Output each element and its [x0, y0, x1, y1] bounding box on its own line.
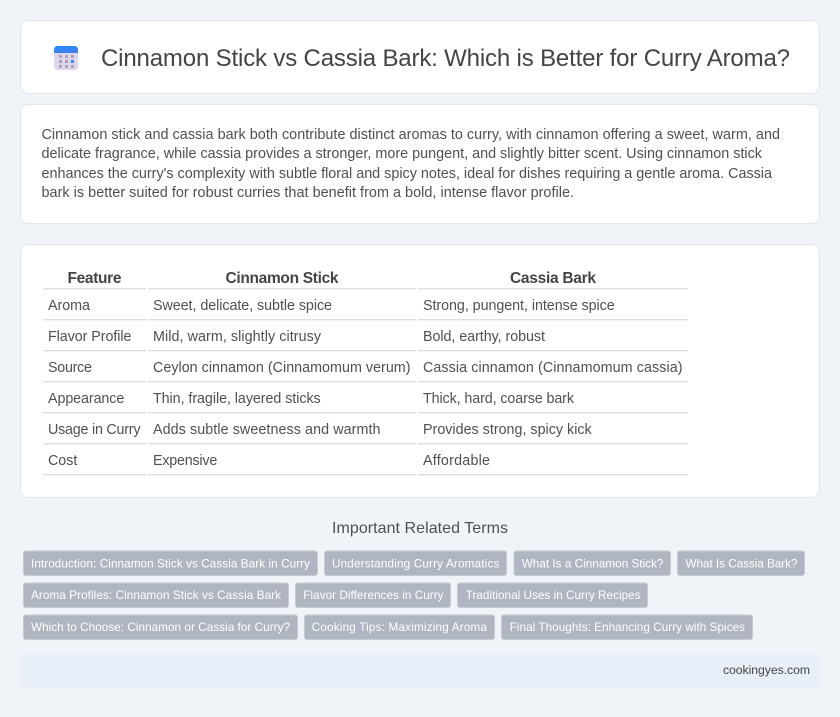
- footer: [20, 654, 820, 687]
- table row: source: Source: [48, 360, 92, 376]
- tag: [324, 551, 506, 576]
- table header row: Cinnamon Stick: [226, 270, 339, 287]
- table row: cost: Cost: [48, 453, 77, 469]
- table header row: Cassia Bark: [510, 270, 596, 287]
- tag: Flavor Differences in Curry: [303, 589, 444, 602]
- table row: flavor profile: Flavor Profile: [48, 329, 132, 345]
- table row: flavor profile: Mild, warm, slightly citrusy: [153, 329, 322, 345]
- table row: source: Cassia cinnamon (Cinnamomum cassia): [423, 360, 682, 376]
- table row: usage in curry: Provides strong, spicy kick: [423, 422, 593, 438]
- text block: introduction paragraph: [42, 127, 780, 201]
- table row: aroma: [48, 298, 615, 314]
- text block: introduction paragraph: Cinnamon stick and cassia bark both contribute distinct aromas to curry, with cinnamon offering a sweet, warm, and: [42, 127, 780, 143]
- footer source credit: cookingyes.com: [723, 663, 810, 677]
- tag list: related terms: [24, 551, 804, 640]
- tag: Final Thoughts: Enhancing Curry with Spices: [510, 621, 745, 634]
- tag: [458, 583, 648, 608]
- tag: [502, 615, 752, 640]
- table row: usage in curry: Adds subtle sweetness and warmth: [153, 422, 381, 438]
- heading: important related terms: Important Related Terms: [332, 520, 508, 537]
- text block: introduction paragraph: enhances the curry's complexity with subtle floral and spicy notes, ideal for dishes requiring a gentle aroma. Cassia: [42, 166, 772, 182]
- tag: [678, 551, 804, 576]
- table row: appearance: Thin, fragile, layered sticks: [153, 391, 321, 407]
- table row: source: Ceylon cinnamon (Cinnamomum verum): [153, 360, 410, 376]
- tag: [24, 551, 318, 576]
- table row: appearance: Appearance: [48, 391, 124, 407]
- tag: [304, 615, 494, 640]
- tag: [296, 583, 450, 608]
- table row: cost: Expensive: [153, 453, 217, 469]
- text block: introduction paragraph: bark is better suited for robust curries that benefit from a bold, intense flavor profile.: [42, 185, 574, 201]
- tag: What Is Cassia Bark?: [686, 557, 798, 570]
- table row: aroma: Strong, pungent, intense spice: [423, 298, 615, 314]
- table row: appearance: [48, 391, 575, 407]
- tag: Which to Choose: Cinnamon or Cassia for Curry?: [31, 621, 290, 634]
- panel: comparison table: [20, 244, 820, 498]
- table header row: Feature: [68, 270, 122, 287]
- tag: Cooking Tips: Maximizing Aroma: [312, 621, 487, 634]
- table row: appearance: Thick, hard, coarse bark: [423, 391, 575, 407]
- tag: [514, 551, 670, 576]
- table row: flavor profile: [48, 329, 545, 345]
- table row: usage in curry: [48, 422, 593, 438]
- table row: flavor profile: Bold, earthy, robust: [423, 329, 545, 345]
- table row: aroma: Sweet, delicate, subtle spice: [153, 298, 332, 314]
- tag: [24, 583, 288, 608]
- tag: [24, 615, 298, 640]
- tag: Traditional Uses in Curry Recipes: [466, 589, 641, 602]
- table row: source: [48, 360, 682, 376]
- panel: title header: [20, 20, 820, 94]
- title: Cinnamon Stick vs Cassia Bark: Which is Better for Curry Aroma?: [101, 45, 790, 72]
- table header row: [68, 270, 596, 287]
- table row: usage in curry: Usage in Curry: [48, 422, 141, 438]
- panel: introduction: [20, 104, 820, 224]
- tag: Introduction: Cinnamon Stick vs Cassia Bark in Curry: [31, 557, 310, 570]
- tag: Aroma Profiles: Cinnamon Stick vs Cassia Bark: [31, 589, 281, 602]
- text block: introduction paragraph: delicate fragrance, while cassia provides a stronger, more pungent, and slightly bitter scent. Using cinnamon stick: [42, 146, 763, 162]
- table row: cost: Affordable: [423, 453, 490, 469]
- table row: aroma: Aroma: [48, 298, 90, 314]
- tag: What Is a Cinnamon Stick?: [522, 557, 664, 570]
- icon: calendar: [54, 46, 78, 70]
- tag: Understanding Curry Aromatics: [332, 557, 499, 570]
- table row: cost: [48, 453, 490, 469]
